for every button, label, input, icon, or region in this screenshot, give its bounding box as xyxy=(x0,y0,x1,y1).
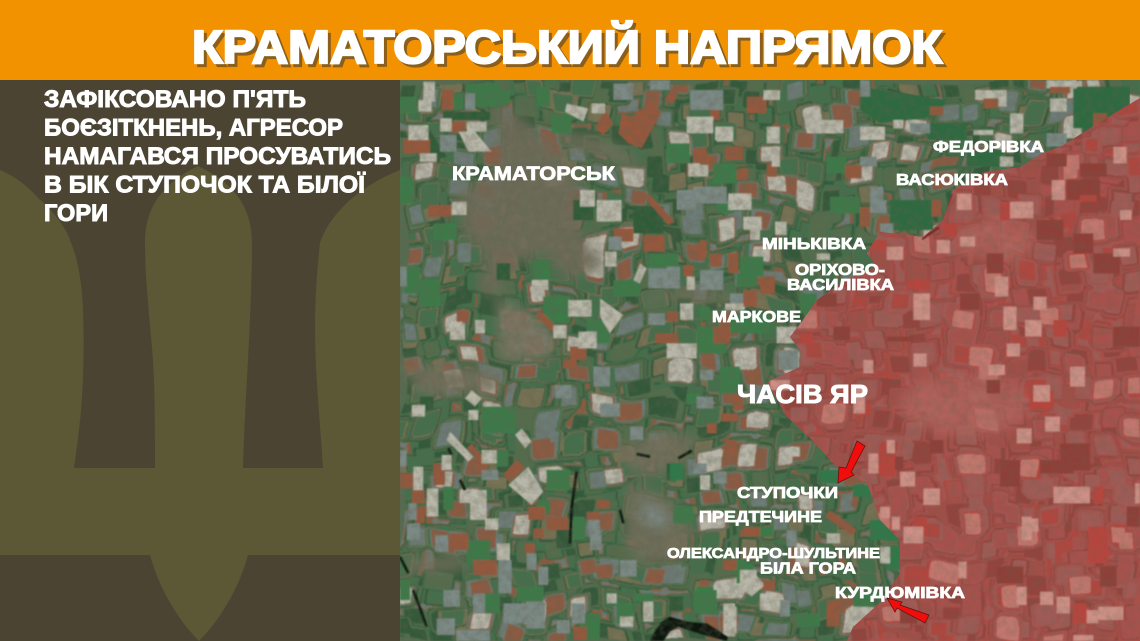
map label: Orikhovo-Vasylivka: ВАСИЛІВКА xyxy=(787,277,895,294)
map mosaic of farm fields xyxy=(400,80,1140,641)
map label: Kramatorsk: КРАМАТОРСЬК xyxy=(452,163,615,185)
map label: Chasiv Yar: ЧАСІВ ЯР xyxy=(737,379,868,409)
map fields: central column xyxy=(700,120,887,410)
water bodies xyxy=(650,617,728,641)
panel: satellite map xyxy=(400,80,1140,641)
map label: Stupochky: СТУПОЧКИ xyxy=(737,485,838,502)
map label: Predtechyne: ПРЕДТЕЧИНЕ xyxy=(699,509,822,526)
map fields: south-west sector xyxy=(400,360,780,641)
map fields: north-west sector xyxy=(400,80,780,360)
map label: Minkivka: МІНЬКІВКА xyxy=(762,236,867,253)
text block: situation summary xyxy=(44,86,391,227)
title: КРАМАТОРСЬКИЙ НАПРЯМОК xyxy=(195,24,946,76)
map label: Oleksandro-Shultyne: ОЛЕКСАНДРО-ШУЛЬТИНЕ xyxy=(667,545,880,562)
map label: Markove: МАРКОВЕ xyxy=(712,309,801,326)
map fields: south-east green sector xyxy=(643,447,900,633)
map fields: north-east green sector xyxy=(860,80,1130,237)
map label: Vasiukivka: ВАСЮКІВКА xyxy=(896,172,1009,189)
map label: Fedorivka: ФЕДОРІВКА xyxy=(933,139,1045,156)
map label: Orikhovo-Vasylivka: ОРІХОВО- xyxy=(795,262,885,279)
icon: trident watermark xyxy=(0,166,400,641)
text block: situation summary: В БІК СТУПОЧОК ТА БІЛОЇ xyxy=(44,172,366,198)
text block: situation summary: НАМАГАВСЯ ПРОСУВАТИСЬ xyxy=(44,143,391,170)
left panel background xyxy=(0,80,400,641)
arrow: towards Kurdiumivka xyxy=(887,598,929,623)
map label: Kurdiumivka: КУРДЮМІВКА xyxy=(835,585,966,602)
map label: Orikhovo-Vasylivka xyxy=(787,262,895,294)
header bar xyxy=(0,0,1140,80)
text block: situation summary: ЗАФІКСОВАНО П'ЯТЬ xyxy=(44,86,306,113)
title: КРАМАТОРСЬКИЙ НАПРЯМОК xyxy=(192,21,943,73)
text block: situation summary: ГОРИ xyxy=(44,200,108,227)
arrow: towards Stupochky xyxy=(838,441,865,483)
map: towns and scrubland xyxy=(400,100,740,573)
text block: situation summary: БОЄЗІТКНЕНЬ, АГРЕСОР xyxy=(44,114,343,142)
occupied territory overlay xyxy=(760,90,1140,641)
map label: Bila Hora: БІЛА ГОРА xyxy=(760,560,857,578)
